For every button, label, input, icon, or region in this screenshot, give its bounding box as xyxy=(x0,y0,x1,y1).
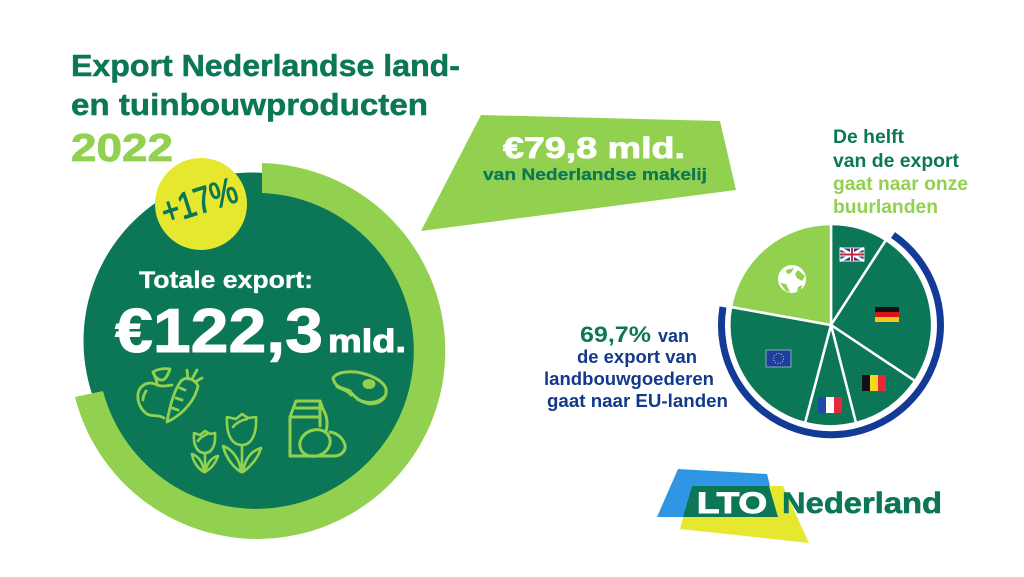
flag: Belgium xyxy=(862,375,886,391)
value: 122,3 mld: €122,3 xyxy=(115,297,323,366)
panel: callout Nederlandse makelij xyxy=(421,115,736,231)
text block: 69,7% naar EU-landen xyxy=(544,322,728,411)
icon: globe xyxy=(778,265,806,293)
slice: Germany xyxy=(831,240,932,381)
text block: 69,7% naar EU-landen: landbouwgoederen xyxy=(544,369,714,389)
title: en tuinbouwproducten xyxy=(71,87,428,122)
arc: EU share xyxy=(721,235,940,435)
text block: de helft van de export xyxy=(833,127,968,218)
value: 122,3 mld: mld. xyxy=(328,323,406,359)
logo: LTO Nederland: Nederland xyxy=(782,487,942,520)
label: totale export: Totale export: xyxy=(139,267,313,294)
text block: 69,7% naar EU-landen: van xyxy=(658,326,689,346)
slice: United Kingdom xyxy=(831,224,886,325)
logo: LTO Nederland: LTO xyxy=(697,487,767,520)
pie chart: export destinations xyxy=(721,224,940,435)
title: 2022 xyxy=(71,127,173,170)
badge: +17% xyxy=(155,158,247,250)
panel: callout Nederlandse makelij: €79,8 mld. xyxy=(503,132,685,165)
slice: EU xyxy=(729,307,831,423)
text block: de helft van de export: gaat naar onze xyxy=(833,174,968,195)
text block: 69,7% naar EU-landen: 69,7% xyxy=(580,322,651,347)
icon: milk carton and egg xyxy=(290,401,345,461)
icon: tulips xyxy=(192,414,261,472)
title: Export Nederlandse land- xyxy=(71,48,460,83)
logo: LTO Nederland xyxy=(657,469,942,543)
flag: France xyxy=(818,397,842,413)
panel: callout Nederlandse makelij: van Nederlandse makelij xyxy=(483,165,707,184)
dark green disc xyxy=(84,172,420,510)
light green progress ring xyxy=(75,163,445,539)
text block: 69,7% naar EU-landen: de export van xyxy=(577,347,697,367)
flag: Germany xyxy=(875,307,899,322)
title xyxy=(71,48,460,170)
text block: de helft van de export: De helft xyxy=(833,127,905,148)
value: 122,3 mld xyxy=(115,297,406,366)
icon: steak xyxy=(333,372,386,404)
flag: EU xyxy=(766,350,791,367)
slice: rest of world xyxy=(731,224,831,325)
text block: de helft van de export: buurlanden xyxy=(833,197,938,218)
panel: total export circle xyxy=(75,158,445,539)
text block: 69,7% naar EU-landen: gaat naar EU-landen xyxy=(547,391,728,411)
icon: apple and carrot xyxy=(138,369,202,422)
slice: Belgium xyxy=(831,325,915,423)
text block: de helft van de export: van de export xyxy=(833,151,960,172)
flag: UK xyxy=(840,248,864,261)
badge: +17%: +17% xyxy=(156,170,243,233)
slice: France xyxy=(805,325,856,426)
